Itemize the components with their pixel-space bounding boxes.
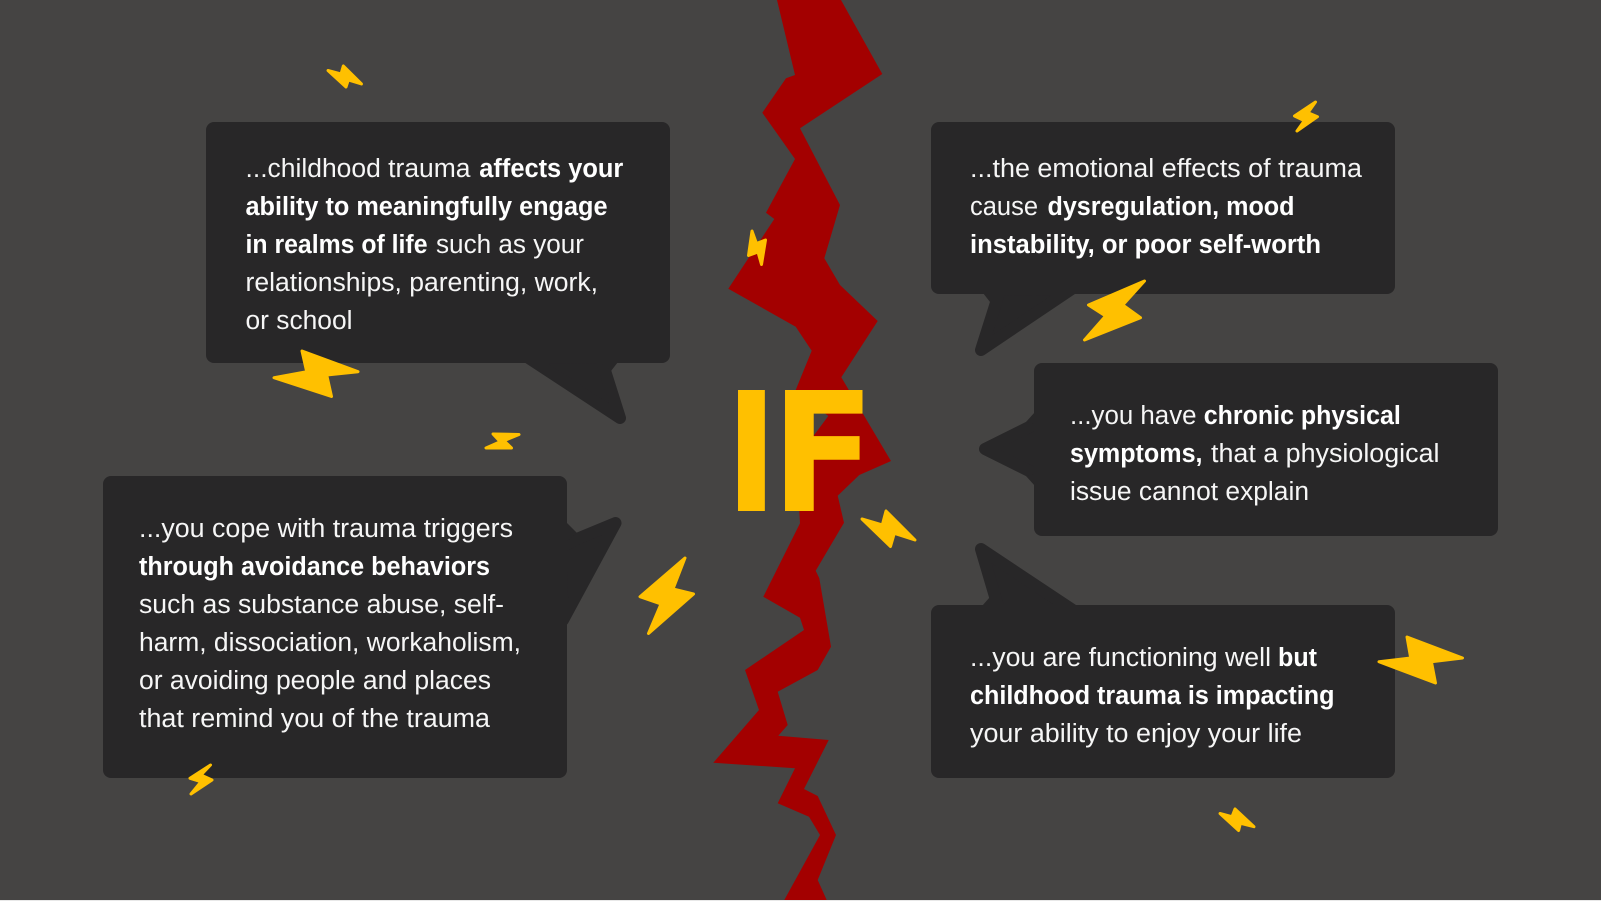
icon: lightning bolt above fifth bubble [486,434,519,448]
panel: chronic physical symptoms [985,363,1498,536]
text block 3 [1070,402,1440,506]
heading: IF: I [725,357,778,551]
speech bubble 4 [931,549,1395,778]
speech bubble 5 [103,476,616,778]
text block 5: that remind you of the trauma [139,705,491,733]
text block 4: but [1278,644,1317,672]
icon: lightning bolt right of IF [862,511,915,546]
icon: lightning bolt under first bubble [274,351,358,396]
text block 3: chronic physical [1204,402,1401,430]
text block 1: or school [246,307,352,335]
crack: red jagged fissure [713,0,891,900]
panel: emotional effects of trauma [931,122,1395,350]
icon: lightning bolt top left [328,66,362,87]
text block 3: ...you have [1070,402,1196,430]
panel: avoidance behaviors [103,476,616,778]
panel: childhood trauma affects realms of life [206,122,670,418]
text block 5 [139,515,521,733]
heading: IF [725,357,875,551]
text block 5: or avoiding people and places [139,667,491,695]
text block 2: dysregulation, mood [1048,193,1294,221]
speech bubble 1 [206,122,670,418]
text block 1: ability to meaningfully engage [246,193,608,221]
text block 1: affects your [479,155,623,183]
text block 5: ...you cope with trauma triggers [139,515,513,543]
text block 2: ...the emotional effects of trauma [970,155,1363,183]
text block 1: such as your [436,231,585,259]
text block 2: cause [970,193,1038,221]
text block 2 [970,155,1363,259]
speech bubble 2 [931,122,1395,350]
text block 1 [246,155,623,335]
text block 5: such as substance abuse, self- [139,591,504,619]
panel: functioning well but impacted [931,549,1395,778]
icon: lightning bolt on crack [748,231,766,264]
icon: lightning bolt right of fourth bubble [1379,637,1462,683]
text block 1: relationships, parenting, work, [246,269,598,297]
text block 1: ...childhood trauma [246,155,471,183]
text block 2: instability, or poor self-worth [970,231,1321,259]
icon: lightning bolt top right [1294,102,1318,131]
text block 4: your ability to enjoy your life [970,720,1302,748]
text block 5: through avoidance behaviors [139,553,490,581]
text block 5: harm, dissociation, workaholism, [139,629,521,657]
text block 4 [970,644,1334,748]
text block 3: that a physiological [1211,440,1440,468]
text block 1: in realms of life [246,231,428,259]
icon: lightning bolt lower left [190,765,212,794]
text block 3: symptoms, [1070,440,1202,468]
text block 4: childhood trauma is impacting [970,682,1334,710]
speech bubble 3 [985,363,1498,536]
icon: lightning bolt right of fifth bubble [640,558,694,634]
icon: lightning bolt bottom right [1220,809,1254,830]
text block 4: ...you are functioning well [970,644,1271,672]
heading: IF: F [771,357,875,551]
text block 3: issue cannot explain [1070,478,1309,506]
icon: lightning bolt under second bubble [1084,281,1144,340]
